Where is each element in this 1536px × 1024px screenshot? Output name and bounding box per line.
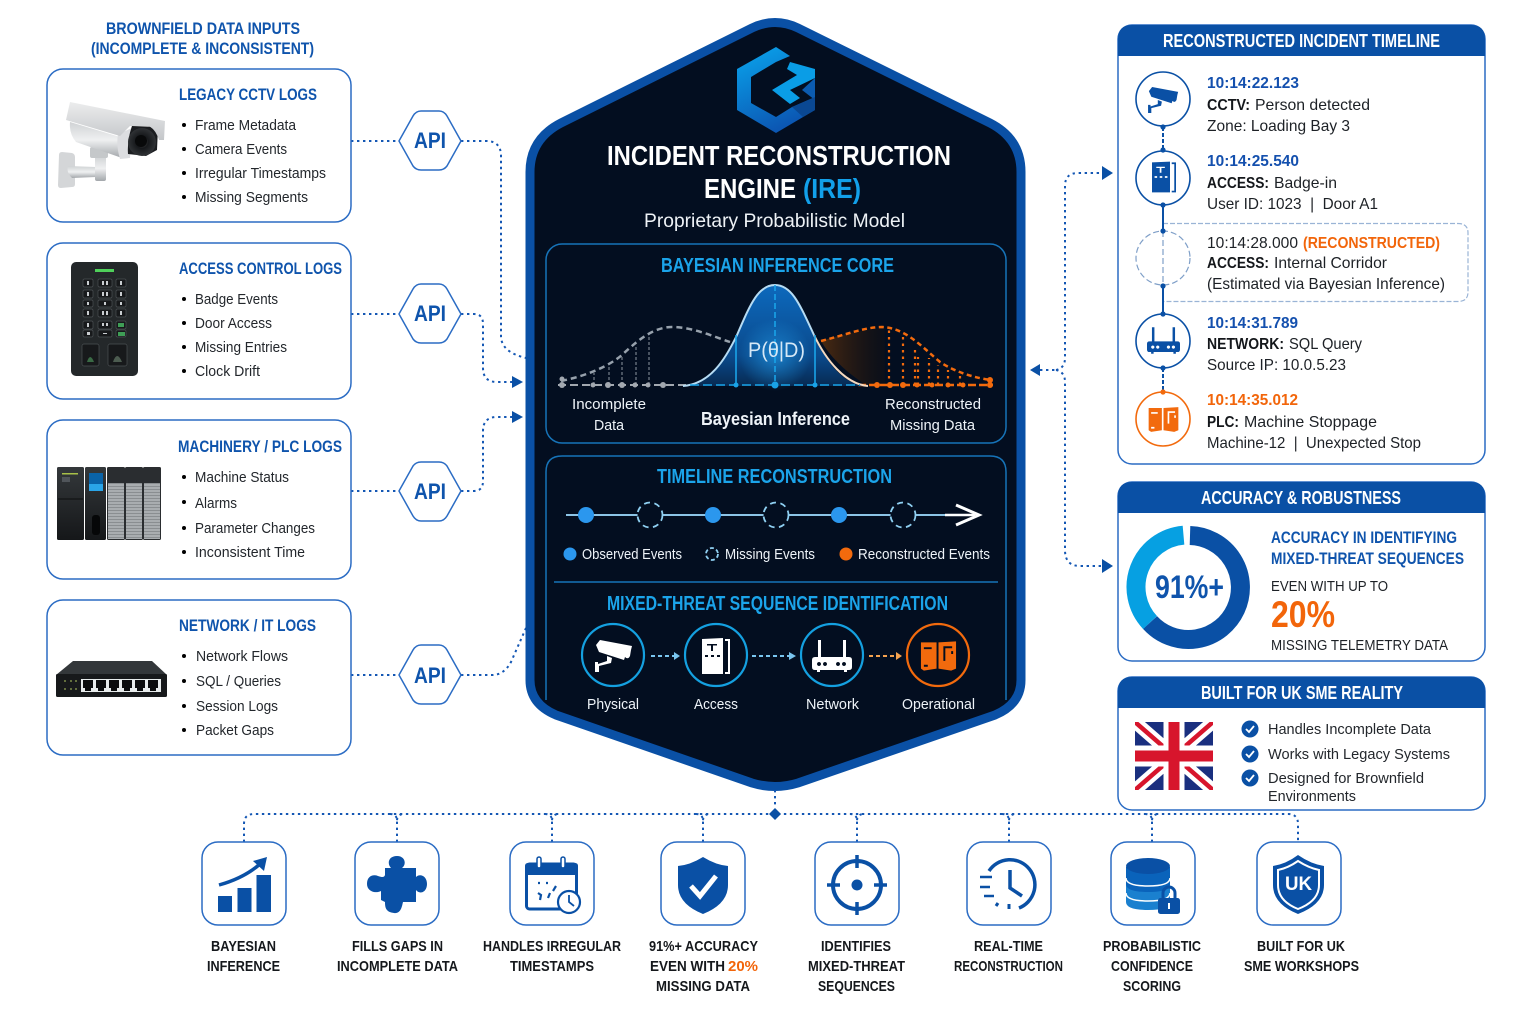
event: reconstructed access: 10:14:28.000: [1207, 235, 1298, 252]
label: [483, 938, 621, 975]
label: HANDLES IRREGULAR: [483, 938, 621, 955]
panel: network and IT logs: [47, 600, 351, 755]
bullet list: Missing Entries: [195, 339, 287, 356]
event: reconstructed access: ACCESS:: [1207, 255, 1269, 272]
heading: mixed-threat sequence: MIXED-THREAT SEQUENCE IDENTIFICATION: [607, 593, 948, 615]
bullet list: [182, 469, 315, 561]
heading: NETWORK / IT LOGS: [179, 616, 316, 635]
label: MISSING DATA: [656, 978, 750, 995]
label: PROBABILISTIC: [1103, 938, 1201, 955]
checklist: [1242, 720, 1450, 805]
heading: brownfield data inputs: (INCOMPLETE & INCONSISTENT): [91, 39, 314, 58]
label: SME WORKSHOPS: [1244, 958, 1359, 975]
chart: Bayesian bell curve: [683, 285, 868, 391]
label: reconstructed missing data: Reconstructed: [885, 396, 981, 413]
bullet list: Alarms: [195, 495, 237, 512]
label: reconstructed missing data: Missing Data: [890, 417, 976, 434]
sequence: operational: Operational: [902, 696, 975, 713]
checklist: Handles Incomplete Data: [1268, 721, 1432, 738]
chart: reconstructed data distribution: [821, 327, 993, 388]
arrow: [752, 652, 796, 660]
label: [1244, 938, 1359, 975]
heading: ACCESS CONTROL LOGS: [179, 259, 342, 278]
label: SEQUENCES: [818, 978, 895, 995]
label: RECONSTRUCTION: [954, 958, 1063, 975]
title: (IRE): [803, 173, 861, 204]
panel: accuracy and robustness: [1118, 482, 1485, 661]
donut chart: 91 percent: 91%+: [1155, 569, 1224, 605]
sequence: operational: [902, 624, 975, 713]
event: network: 10:14:31.789: [1207, 315, 1298, 332]
bullet list: Clock Drift: [195, 363, 261, 380]
sequence: network: [801, 624, 863, 713]
event: reconstructed access: Internal Corridor: [1274, 255, 1388, 272]
accuracy statement: 20%: [1271, 594, 1335, 635]
bullet list: Parameter Changes: [195, 520, 315, 537]
label: INCOMPLETE DATA: [337, 958, 458, 975]
sequence: access: [685, 624, 747, 713]
heading: RECONSTRUCTED INCIDENT TIMELINE: [1163, 31, 1440, 51]
bullet list: Badge Events: [195, 291, 278, 308]
feature: confidence scoring: [1103, 842, 1201, 995]
heading: ACCURACY & ROBUSTNESS: [1201, 488, 1401, 508]
sequence: access: Access: [694, 696, 738, 713]
bullet list: Irregular Timestamps: [195, 165, 326, 182]
panel: legacy CCTV logs: [47, 69, 351, 222]
icon: network switch: [56, 661, 167, 697]
heading: MACHINERY / PLC LOGS: [178, 437, 342, 456]
event: PLC: [1136, 392, 1421, 452]
label: CONFIDENCE: [1111, 958, 1193, 975]
bullet list: [182, 291, 287, 380]
heading: brownfield data inputs: [91, 19, 314, 58]
event: network: SQL Query: [1289, 336, 1362, 353]
label: REAL-TIME: [974, 938, 1043, 955]
bullet list: Door Access: [195, 315, 272, 332]
event: access badge-in: ACCESS:: [1207, 175, 1269, 192]
subtitle: Proprietary Probabilistic Model: [644, 210, 905, 232]
icon: CCTV camera: [58, 102, 165, 188]
connector paths: API to engine: [351, 141, 526, 675]
label: incomplete data: [572, 396, 646, 434]
checklist: Works with Legacy Systems: [1268, 746, 1450, 763]
accuracy statement: MISSING TELEMETRY DATA: [1271, 637, 1448, 654]
panel: Bayesian inference core: [546, 244, 1006, 443]
label: [207, 938, 280, 975]
event: network: [1136, 314, 1362, 374]
checklist: Designed for Brownfield: [1268, 770, 1424, 787]
feature: fills gaps: [337, 842, 458, 975]
event: access badge-in: Badge-in: [1274, 175, 1337, 192]
event: PLC: Machine Stoppage: [1244, 414, 1377, 431]
icon: engine logo: [737, 47, 815, 133]
sequence: network: Network: [806, 696, 859, 713]
icon: keypad: [71, 262, 138, 376]
label: incomplete data: Incomplete: [572, 396, 646, 413]
label: 20%: [728, 958, 758, 975]
label: SCORING: [1123, 978, 1181, 995]
bullet list: [182, 648, 288, 739]
sequence: physical: Physical: [587, 696, 639, 713]
panel: built for UK SME reality: [1118, 677, 1485, 810]
panel: access control logs: [47, 243, 351, 399]
icon: PLC rack: [57, 467, 161, 540]
event: CCTV: Zone: Loading Bay 3: [1207, 118, 1350, 135]
feature: Bayesian inference: [202, 842, 286, 975]
bullet list: [182, 117, 326, 206]
bullet list: Network Flows: [196, 648, 288, 665]
label: EVEN WITH: [650, 958, 725, 975]
heading: brownfield data inputs: BROWNFIELD DATA INPUTS: [106, 19, 300, 38]
legend: Observed Events: [582, 547, 682, 563]
title: ENGINE: [704, 173, 796, 204]
legend: [564, 547, 990, 563]
API badge 3: [399, 462, 461, 521]
feature: irregular timestamps: [483, 842, 621, 975]
timeline connectors: [1162, 127, 1164, 392]
donut chart: 91 percent: [1136, 535, 1240, 639]
title: [607, 140, 951, 204]
bullet list: Camera Events: [195, 141, 287, 158]
event: reconstructed access: (RECONSTRUCTED): [1303, 235, 1440, 252]
label: [808, 938, 905, 995]
event: reconstructed access: [1136, 231, 1445, 293]
event: CCTV: 10:14:22.123: [1207, 75, 1299, 92]
label: IDENTIFIES: [821, 938, 891, 955]
event: PLC: 10:14:35.012: [1207, 392, 1298, 409]
legend: Reconstructed Events: [858, 547, 990, 563]
connector tree to features: [244, 790, 1298, 842]
reconstructed row highlight: [1163, 224, 1468, 302]
label: [337, 938, 458, 975]
API badge 4: [399, 645, 461, 704]
icon: UK flag: [1135, 722, 1213, 790]
arrow: [651, 652, 680, 660]
feature: UK workshops: [1244, 842, 1359, 975]
label: INFERENCE: [207, 958, 280, 975]
label: incomplete data: Data: [594, 417, 625, 434]
timeline: [566, 502, 979, 528]
label: [649, 938, 758, 995]
icon: target: [827, 855, 887, 915]
bullet list: SQL / Queries: [196, 673, 281, 690]
API badge 2: [399, 284, 461, 343]
event: network: Source IP: 10.0.5.23: [1207, 357, 1346, 374]
event: access badge-in: [1136, 151, 1378, 213]
accuracy statement: ACCURACY IN IDENTIFYING: [1271, 529, 1457, 547]
panel: machinery and PLC logs: [47, 420, 351, 579]
panel: reconstructed incident timeline: [1118, 25, 1485, 464]
heading: BAYESIAN INFERENCE CORE: [661, 255, 894, 277]
bullet list: Inconsistent Time: [195, 544, 305, 561]
checklist: Environments: [1268, 788, 1356, 805]
sequence: physical: [582, 624, 644, 713]
event: CCTV: Person detected: [1255, 97, 1370, 114]
chart: Bayesian bell curve: P(θ|D): [748, 339, 805, 362]
bullet list: Machine Status: [195, 469, 289, 486]
event: CCTV: CCTV:: [1207, 97, 1250, 114]
event: reconstructed access: (Estimated via Bayesian Inference): [1207, 276, 1445, 293]
accuracy statement: MIXED-THREAT SEQUENCES: [1271, 550, 1464, 568]
label: 91%+ ACCURACY: [649, 938, 758, 955]
event: PLC: PLC:: [1207, 414, 1239, 431]
API badge 1: [399, 111, 461, 170]
label: BAYESIAN: [211, 938, 276, 955]
label: BUILT FOR UK: [1257, 938, 1345, 955]
label: TIMESTAMPS: [510, 958, 594, 975]
event: CCTV: [1136, 72, 1370, 135]
event: access badge-in: User ID: 1023 | Door A1: [1207, 196, 1378, 213]
panel: timeline reconstruction: [546, 456, 1006, 713]
icon: growth chart: [218, 857, 271, 912]
icon: database with lock: [1126, 858, 1180, 914]
API badge 2: API: [414, 301, 446, 326]
icon: shield with check: [678, 857, 728, 914]
bullet list: Frame Metadata: [195, 117, 297, 134]
feature: accuracy: [649, 842, 758, 995]
API badge 3: API: [414, 479, 446, 504]
accuracy statement: [1271, 529, 1464, 654]
feature: real-time reconstruction: [954, 842, 1063, 975]
label: MIXED-THREAT: [808, 958, 905, 975]
feature: mixed-threat sequences: [808, 842, 905, 995]
panel: central incident reconstruction engine: [530, 22, 1021, 786]
event: access badge-in: 10:14:25.540: [1207, 153, 1299, 170]
label: [954, 938, 1063, 975]
icon: fast clock: [980, 860, 1035, 909]
label: FILLS GAPS IN: [352, 938, 443, 955]
bullet list: Packet Gaps: [196, 722, 274, 739]
bullet list: Session Logs: [196, 698, 278, 715]
API badge 1: API: [414, 128, 446, 153]
API badge 4: API: [414, 663, 446, 688]
connector dots: [1160, 124, 1166, 395]
arrow: [869, 652, 902, 660]
icon: puzzle piece: [367, 856, 427, 913]
heading: TIMELINE RECONSTRUCTION: [657, 466, 892, 488]
event: PLC: Machine-12 | Unexpected Stop: [1207, 435, 1421, 452]
icon: UK shield: UK: [1285, 874, 1312, 895]
heading: LEGACY CCTV LOGS: [179, 85, 317, 104]
accuracy statement: EVEN WITH UP TO: [1271, 578, 1388, 595]
heading: BUILT FOR UK SME REALITY: [1201, 683, 1403, 703]
connector paths: engine to outputs: [1030, 166, 1113, 573]
event: network: NETWORK:: [1207, 336, 1284, 353]
legend: Missing Events: [725, 547, 815, 563]
icon: calendar and clock: [525, 857, 580, 913]
title: INCIDENT RECONSTRUCTION: [607, 140, 951, 171]
bullet list: Missing Segments: [195, 189, 308, 206]
label: [1103, 938, 1201, 995]
label: reconstructed missing data: [885, 396, 981, 434]
label: Bayesian inference: Bayesian Inference: [701, 408, 850, 429]
chart: incomplete data distribution: [558, 327, 730, 388]
